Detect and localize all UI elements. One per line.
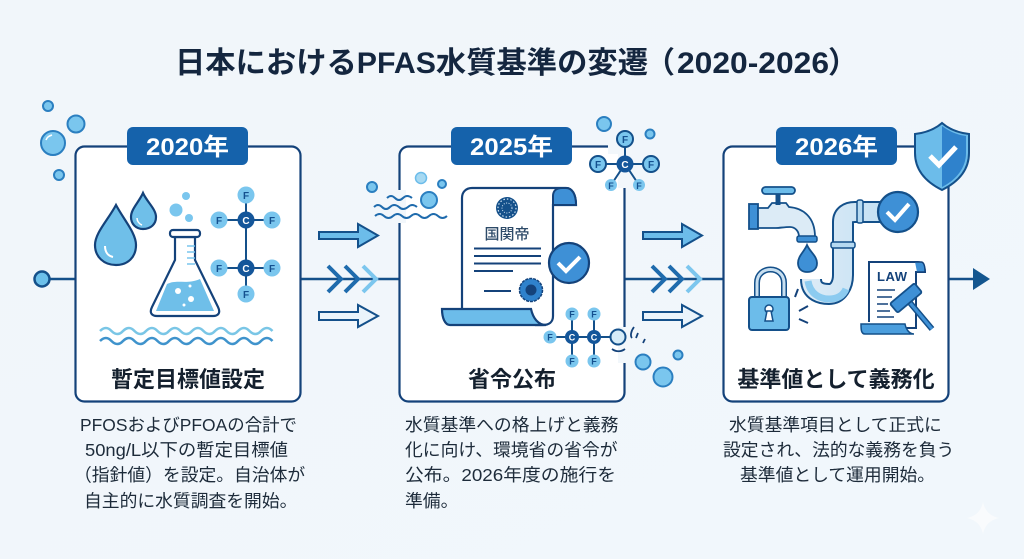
text block: 2025: 化に向け、環境省の省令が — [405, 440, 618, 460]
icon: padlock — [749, 270, 808, 330]
icon: PFAS molecule: F — [243, 290, 249, 301]
icon: molecule upper right: F — [648, 160, 654, 171]
icon: molecule lower: F — [591, 310, 597, 320]
icon: small water drop — [131, 193, 156, 229]
panel: 2026 — [724, 127, 948, 402]
icon: molecule upper right: F — [608, 181, 614, 191]
icon: official document scroll — [442, 188, 576, 325]
text block: 2026: 水質基準項目として正式に — [729, 415, 942, 435]
badge: 2025 — [451, 127, 572, 165]
icon: PFAS molecule: F — [216, 216, 222, 227]
document text lines — [474, 248, 541, 291]
icon: water waves — [100, 328, 272, 344]
text block: 2020: PFOSおよびPFOAの合計で — [80, 415, 297, 435]
title: ） — [828, 47, 858, 80]
emblem — [496, 197, 518, 219]
timeline line and start node — [34, 272, 980, 286]
panel: 2025 — [367, 127, 645, 402]
icon: molecule lower: C — [569, 332, 576, 342]
document heading: 国関帝 — [484, 226, 530, 243]
panel heading: 省令公布 — [468, 367, 556, 392]
arrow: chevrons between 2025 and 2026 — [652, 266, 700, 292]
text block: 2025: 公布。2026年度の施行を — [405, 465, 616, 485]
icon: molecule lower: C — [591, 332, 598, 342]
text block: 2025: 準備。 — [405, 491, 458, 511]
title: 2020-2026 — [677, 47, 829, 80]
icon: PFAS molecule: F — [243, 191, 249, 202]
icon: law document with gavel: LAW — [877, 269, 908, 284]
badge: 2026 — [776, 127, 897, 165]
icon: pipe with check — [808, 192, 918, 299]
text block: 2026: 基準値として運用開始。 — [740, 465, 935, 485]
bubbles: bottom right of 2025 — [636, 350, 682, 386]
icon: PFAS molecule: F — [216, 264, 222, 275]
text block: 2020 — [74, 415, 305, 511]
seal — [520, 278, 542, 302]
icon: sparkle watermark — [967, 502, 999, 534]
arrow: timeline end — [973, 268, 990, 290]
icon: molecule lower — [544, 308, 645, 368]
arrow: bottom between 2025 and 2026 — [643, 305, 702, 327]
icon: molecule upper right: C — [621, 160, 629, 171]
title — [175, 47, 858, 80]
icon: law document with gavel — [861, 262, 932, 334]
text block: 2025: 水質基準への格上げと義務 — [405, 415, 619, 435]
icon: drop from faucet — [798, 245, 817, 272]
arrow: top between 2020 and 2025 — [319, 224, 378, 247]
panel heading: 暫定目標値設定 — [111, 367, 265, 392]
title: 日本におけるPFAS水質基準の変遷 — [175, 47, 648, 80]
icon: molecule upper right — [590, 131, 659, 191]
icon: molecule lower: F — [591, 356, 597, 366]
icon: waves and bubbles — [367, 172, 447, 218]
icon: faucet — [749, 187, 817, 242]
badge: 2020 — [127, 127, 248, 165]
panel: 2020 — [76, 127, 300, 402]
icon: molecule lower: F — [569, 310, 575, 320]
icon: molecule lower: F — [547, 332, 553, 342]
text block: 2025 — [405, 415, 619, 511]
text block: 2026: 設定され、法的な義務を負う — [723, 440, 954, 460]
icon: flask with bubbles — [151, 192, 219, 316]
icon: shield with check — [915, 123, 969, 190]
icon: PFAS molecule — [210, 186, 280, 302]
arrow: top between 2025 and 2026 — [643, 224, 702, 247]
icon: molecule upper right: F — [622, 135, 628, 146]
icon: check badge — [549, 243, 589, 283]
badge: 2025: 2025年 — [470, 134, 553, 161]
title: （ — [645, 47, 675, 80]
text block: 2020: 自主的に水質調査を開始。 — [84, 491, 297, 511]
text block: 2020: （指針値）を設定。自治体が — [74, 465, 305, 485]
panel heading: 基準値として義務化 — [737, 367, 935, 392]
bubbles: top right of 2025 — [597, 117, 654, 138]
arrow: bottom between 2020 and 2025 — [319, 305, 378, 327]
text block: 2020: 50ng/L以下の暫定目標値 — [85, 440, 288, 460]
badge: 2020: 2020年 — [146, 134, 229, 161]
text block: 2026 — [723, 415, 954, 485]
icon: large water drop — [95, 205, 136, 265]
decorative bubbles: top left — [41, 101, 84, 180]
icon: PFAS molecule: C — [242, 216, 250, 227]
icon: PFAS molecule: F — [269, 264, 275, 275]
icon: molecule lower: F — [569, 356, 575, 366]
icon: molecule upper right: F — [595, 160, 601, 171]
arrow: chevrons between 2020 and 2025 — [328, 266, 376, 292]
icon: PFAS molecule: F — [269, 216, 275, 227]
badge: 2026: 2026年 — [795, 134, 878, 161]
icon: molecule upper right: F — [636, 181, 642, 191]
icon: PFAS molecule: C — [242, 264, 250, 275]
